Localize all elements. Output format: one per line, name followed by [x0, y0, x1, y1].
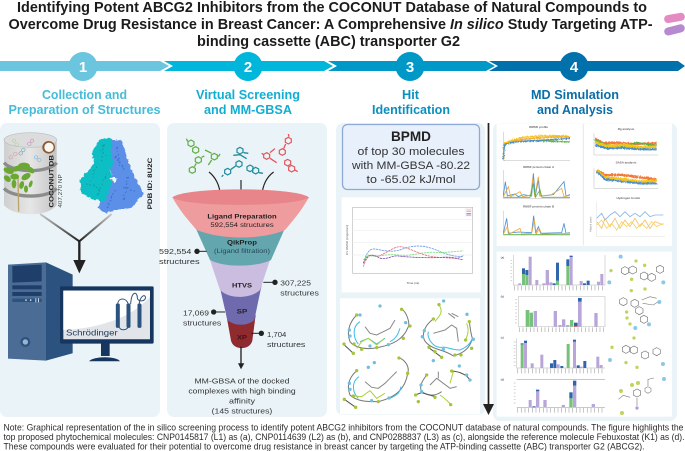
callout: 307,225 structures: 307,225 — [280, 278, 311, 287]
funnel: SP level — [219, 285, 262, 325]
step 2 number — [234, 52, 262, 81]
callout: 592,554 structures: 592,554 — [159, 247, 192, 256]
label: COCONUT DB: 407,270 NP — [58, 174, 64, 208]
heading: step 1 — [8, 87, 160, 117]
heading: step 4 — [531, 87, 619, 117]
label: Schrödinger: Schrödinger — [66, 328, 118, 338]
heading: step 4: MD Simulation — [531, 87, 619, 102]
bar chart c — [515, 338, 605, 371]
panel: virtual screening — [167, 123, 327, 417]
icon: red ligands — [262, 134, 298, 172]
panel labels: (a) — [501, 256, 504, 260]
icon: teal ligands — [222, 147, 263, 177]
step arrow 3 — [328, 61, 495, 71]
icon: ABCG2 protein structure — [82, 140, 141, 211]
chart: BPMD pose score lines — [342, 197, 481, 292]
group: step 1 artwork — [3, 133, 154, 361]
arrow: long downward flow — [483, 123, 494, 415]
callout: 17,069 structures — [183, 308, 225, 327]
diagram a — [343, 309, 409, 353]
callout: BPMD box: BPMD — [391, 128, 431, 144]
funnel labels: Ligand Preparation — [207, 214, 277, 221]
bar chart b — [516, 297, 605, 330]
callout: 592,554 structures: structures — [159, 257, 200, 266]
molecule b — [620, 287, 661, 330]
chart: protein RMSF chain A: RMSF protein chain A — [523, 165, 555, 169]
panel: collection and preparation — [0, 123, 160, 417]
group: MD line charts — [497, 123, 672, 246]
funnel labels — [207, 214, 277, 341]
molecule a — [607, 255, 665, 284]
chart: hydrogen bonds — [588, 196, 665, 237]
title: Overcome Drug Resistance in Breast Cancer: A Comprehensive In silico Study Targeting ATP- — [8, 16, 653, 33]
heading: step 1: Preparation of Structures — [8, 102, 160, 117]
panel labels: (d) — [501, 378, 504, 382]
step 1 number: 1 — [79, 59, 87, 76]
callout: BPMD box: of top 30 molecules — [358, 146, 465, 158]
callout: 592,554 structures — [159, 247, 207, 266]
funnel labels: (Ligand filtration) — [214, 248, 270, 255]
icon: monitor with Schrödinger — [60, 286, 154, 361]
molecule c — [608, 336, 665, 369]
icon: COCONUT database cylinder — [3, 133, 57, 214]
funnel labels: XP — [237, 334, 248, 341]
heading: step 1: Collection and — [42, 87, 127, 102]
chart: radius of gyration — [594, 127, 658, 155]
step 4 number: 4 — [570, 59, 579, 76]
step 1 number — [68, 52, 98, 81]
step arrow 2 — [164, 61, 333, 71]
heading: step 2: Virtual Screening — [196, 87, 300, 102]
chart: RMSD: RMSD profile — [529, 125, 548, 129]
text: MM-GBSA result — [188, 376, 296, 415]
chart: hydrogen bonds: Hydrogen bonds — [616, 196, 641, 200]
process banner — [0, 52, 685, 81]
chart: protein RMSF chain B: RMSF protein chain B — [523, 205, 555, 209]
callout: 1,704 structures: 1,704 — [267, 330, 287, 339]
label: COCONUT DB — [48, 155, 64, 208]
heading: step 4: and Analysis — [537, 102, 613, 117]
chart: protein RMSF chain A — [503, 165, 570, 198]
heading: step 3: Identification — [372, 102, 450, 117]
diagram c — [344, 358, 408, 407]
group: step 2 funnel artwork — [159, 134, 319, 415]
step 4 number — [560, 52, 588, 81]
heading: step 3: Hit — [402, 87, 420, 102]
callout: 17,069 structures: structures — [183, 318, 222, 327]
label: COCONUT DB: COCONUT DB — [48, 155, 55, 208]
group: interaction molecules — [607, 255, 666, 415]
funnel labels: QikProp — [227, 239, 257, 246]
chart: SASA — [594, 160, 658, 188]
chart: radius of gyration: Rg analysis — [618, 127, 635, 131]
diagram d — [415, 371, 470, 405]
panel labels: (b) — [501, 294, 504, 298]
funnel: XP level — [226, 315, 256, 348]
chart: SASA: SASA analysis — [616, 160, 637, 164]
step 2 number: 2 — [244, 59, 252, 76]
group: energy decomposition bar charts — [497, 252, 672, 417]
step arrow 1 — [0, 61, 169, 71]
arrows: ligands into funnel — [209, 172, 274, 201]
bar chart d — [515, 379, 605, 410]
funnel labels: HTVS — [232, 283, 253, 290]
title — [8, 0, 653, 50]
molecule d — [618, 377, 666, 415]
callout: 307,225 structures — [263, 278, 319, 297]
text: MM-GBSA result: (145 structures) — [212, 406, 273, 415]
chart: hydrogen bonds: Hbond count — [588, 216, 592, 232]
panel: MD simulation — [493, 123, 677, 421]
heading: step 2: and MM-GBSA — [204, 102, 293, 117]
panel labels: (c) — [501, 336, 504, 340]
funnel — [172, 189, 309, 348]
panel labels — [501, 256, 504, 382]
step 3 number: 3 — [406, 59, 414, 76]
chart: BPMD pose score lines: CV RMSD (Angstrom) — [345, 225, 349, 255]
callout: BPMD box — [342, 124, 480, 190]
panel: ligand interaction diagrams — [340, 298, 480, 414]
title: binding cassette (ABC) transporter G2 — [197, 33, 460, 50]
funnel: QikProp level — [195, 227, 286, 266]
diagram b — [423, 305, 472, 357]
funnel labels: SP — [237, 308, 248, 315]
arrow: inputs merging to computer — [40, 214, 112, 273]
chart: BPMD pose score lines: Time (ns) — [407, 281, 419, 285]
heading: step 3 — [372, 87, 450, 117]
text: MM-GBSA result: complexes with high binding — [188, 386, 296, 395]
funnel: HTVS level — [208, 255, 272, 297]
bar chart a — [511, 255, 605, 288]
text: MM-GBSA result: affinity — [229, 396, 255, 405]
icon: computer tower — [8, 262, 73, 361]
callout: 17,069 structures: 17,069 — [183, 308, 209, 317]
step arrow 4 — [489, 61, 685, 71]
chart: RMSD — [503, 125, 570, 161]
callout: 307,225 structures: structures — [280, 288, 319, 297]
callout: 1,704 structures: structures — [267, 340, 306, 349]
icon: pills — [663, 12, 685, 36]
text: MM-GBSA result: MM-GBSA of the docked — [194, 376, 289, 385]
funnel: Ligand Preparation level — [172, 197, 309, 237]
chart: protein RMSF chain B — [503, 205, 570, 235]
icon: green ligands — [186, 139, 220, 173]
note text — [4, 422, 684, 451]
callout: BPMD box: to -65.02 kJ/mol — [366, 174, 456, 186]
funnel labels: 592,554 structures — [210, 222, 274, 229]
arrow: funnel to MM-GBSA — [238, 347, 244, 369]
panel: hit identification — [336, 123, 485, 415]
callout: 1,704 structures — [251, 330, 306, 349]
icon: GPCR ribbon — [116, 293, 145, 330]
label: PDB ID: PDB ID: 8U2C — [147, 157, 154, 209]
step 3 number — [396, 52, 424, 81]
heading: step 2 — [196, 87, 300, 117]
callout: BPMD box: with MM-GBSA -80.22 — [351, 160, 470, 172]
